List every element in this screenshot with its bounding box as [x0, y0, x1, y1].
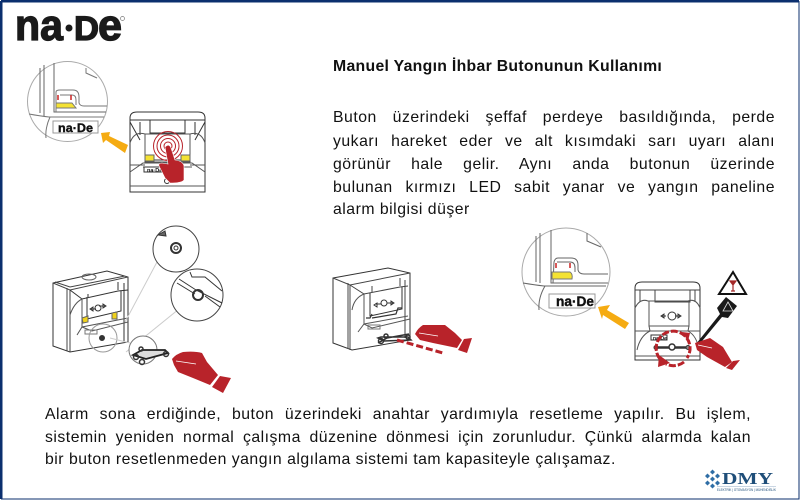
detail circle: key slot: [171, 269, 223, 321]
device: middle with key inserted: [333, 268, 411, 350]
detail circle: raised window: [28, 62, 108, 142]
device: button pressed: na·De: [147, 168, 162, 174]
arrow: yellow upper left: [101, 132, 128, 153]
title: Manuel Yangın İhbar Butonunun Kullanımı: [333, 58, 662, 75]
warning tag and triangle: [696, 272, 746, 346]
device: button pressed: [130, 112, 205, 192]
detail circle: window lowered: na·De: [556, 293, 594, 309]
key: [129, 336, 168, 364]
arrow: yellow right: [598, 305, 629, 329]
hand: right: [695, 338, 740, 370]
logo: DMY: [705, 469, 776, 492]
logo: DMY: DMY: [722, 469, 773, 488]
text block: reset description: bir buton resetlenmeden yangın algılama sistemi tam kapasiteyle çalışamaz.: [45, 451, 616, 468]
dashed red rotation circle: [656, 331, 690, 367]
text block: usage description: [333, 109, 775, 218]
text block: reset description: Alarm sona erdiğinde, buton üzerindeki anahtar yardımıyla resetleme yapılır. Bu işlem,: [45, 406, 751, 423]
device: reset with key: [635, 282, 700, 360]
logo: na-de: [15, 1, 124, 50]
text block: reset description: sistemin yeniden normal çalışma düzenine dönmesi için zorunludur. Çünkü alarmda kalan: [45, 429, 751, 446]
text block: usage description: alarm bilgisi düşer: [333, 201, 470, 218]
logo: na-de: na: [15, 1, 63, 50]
logo: na-de: e: [98, 1, 122, 50]
text block: usage description: Buton üzerindeki şeffaf perdeye basıldığında, perde: [333, 109, 775, 126]
device: reset with key: na·De: [653, 336, 667, 342]
sound waves: [154, 132, 182, 160]
device: left three-quarter view: [53, 226, 223, 364]
logo: na-de: D: [74, 10, 99, 48]
logo: DMY: ELEKTRİK | OTOMASYON | MÜHENDİSLİK: [717, 487, 776, 492]
hand: middle: [415, 325, 472, 353]
dashed red motion line: [397, 340, 443, 353]
text block: usage description: yukarı hareket eder ve alt kısımdaki sarı uyarı alanı: [333, 133, 775, 150]
detail circle: window lowered: [522, 228, 610, 316]
detail circle: raised window: na·De: [58, 121, 93, 135]
text block: usage description: görünür hale gelir. Aynı anda butonun üzerinde: [333, 156, 775, 173]
text block: usage description: bulunan kırmızı LED sabit yanar ve yangın paneline: [333, 179, 775, 196]
text block: reset description: [45, 406, 751, 468]
hand: left: [172, 352, 231, 393]
detail circle: screw: [153, 226, 199, 272]
